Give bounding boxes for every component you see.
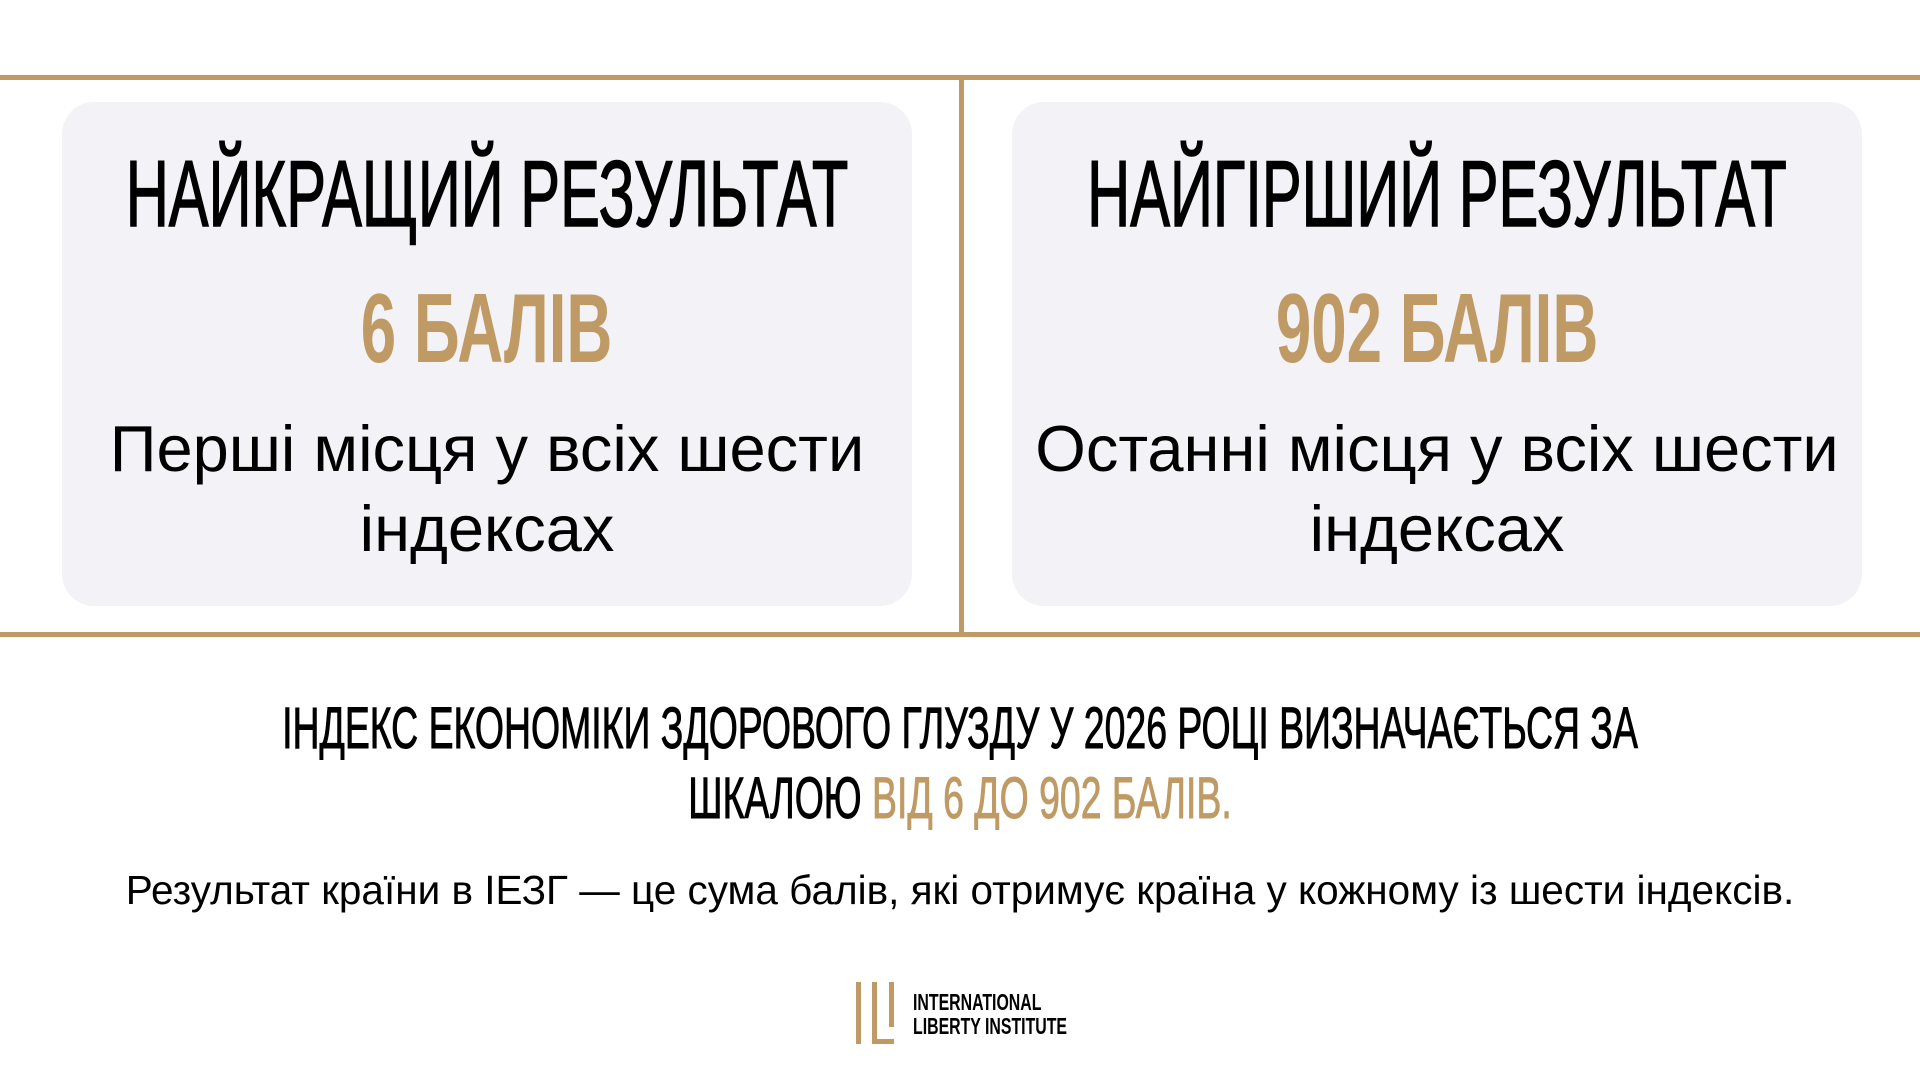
- panel: best result: [62, 102, 912, 606]
- headline: index scale: ШКАЛОЮ ВІД 6 ДО 902 БАЛІВ.: [688, 766, 1232, 831]
- value: 902 points: 902 БАЛІВ: [1276, 273, 1598, 383]
- text: worst description: [1035, 412, 1839, 565]
- heading: best result: НАЙКРАЩИЙ РЕЗУЛЬТАТ: [126, 141, 848, 246]
- bottom divider line: [0, 632, 1920, 637]
- value: 6 points: 6 БАЛІВ: [361, 273, 613, 383]
- logo: International Liberty Institute: [856, 982, 1067, 1044]
- vertical divider line: [959, 75, 964, 637]
- panel: worst result: [1012, 102, 1862, 606]
- text: worst description: індексах: [1310, 492, 1564, 565]
- icon: ILI bars: [856, 982, 894, 1044]
- logo text: LIBERTY INSTITUTE: [913, 1013, 1067, 1039]
- logo text: [913, 989, 1067, 1039]
- text: worst description: Останні місця у всіх шести: [1035, 412, 1839, 485]
- top divider line: [0, 75, 1920, 80]
- logo text: INTERNATIONAL: [913, 989, 1041, 1015]
- text: best description: індексах: [360, 492, 614, 565]
- headline: index scale: [282, 696, 1638, 831]
- text: best description: [110, 412, 864, 565]
- heading: worst result: НАЙГІРШИЙ РЕЗУЛЬТАТ: [1087, 141, 1787, 246]
- headline: index scale: ІНДЕКС ЕКОНОМІКИ ЗДОРОВОГО ГЛУЗДУ У 2026 РОЦІ ВИЗНАЧАЄТЬСЯ ЗА: [282, 696, 1638, 761]
- text: best description: Перші місця у всіх шести: [110, 412, 864, 485]
- text: explanation: Результат країни в ІЕЗГ — це сума балів, які отримує країна у кожному із шести індексів.: [126, 867, 1794, 913]
